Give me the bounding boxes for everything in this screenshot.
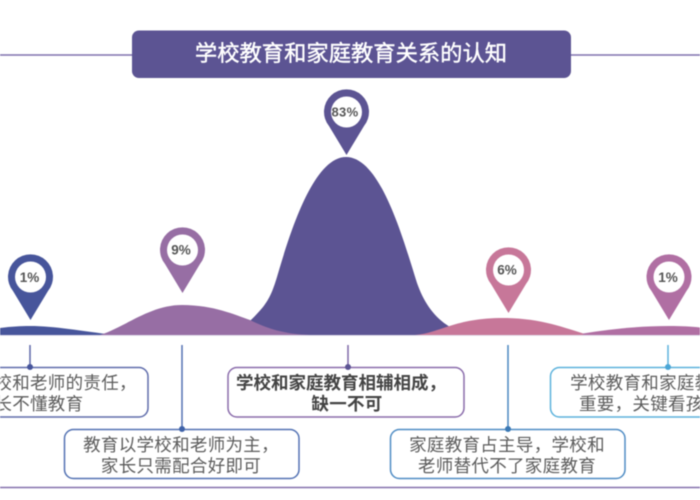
- callout: box 2: [64, 345, 299, 478]
- callout: box 4: [390, 345, 625, 478]
- pin: 6%: [486, 247, 531, 313]
- callout: box 2: 家长只需配合好即可: [101, 456, 261, 476]
- distribution curves chart: [0, 157, 700, 335]
- callout: box 3 (highlighted): 缺一不可: [311, 394, 383, 414]
- callout: box 3 (highlighted): 学校和家庭教育相辅相成，: [236, 373, 446, 393]
- callout: box 4: 家庭教育占主导，学校和: [409, 435, 605, 455]
- curve: 1% right: [583, 326, 700, 335]
- pin: 1% left: 1%: [20, 270, 39, 285]
- callout: box 3 (highlighted): [228, 345, 464, 417]
- pin: 1% right: [646, 254, 692, 320]
- pin: 1% left: [8, 254, 53, 320]
- title banner: 学校教育和家庭教育关系的认知: [195, 41, 507, 66]
- callout: box 1: [0, 345, 148, 417]
- title banner: [132, 30, 571, 78]
- callout: box 2: 教育以学校和老师为主，: [83, 435, 279, 455]
- pin: 6%: 6%: [497, 262, 517, 278]
- curve: 1% left: [0, 326, 115, 335]
- curve: 6%: [415, 318, 585, 335]
- pin: 83%: [324, 89, 369, 155]
- pin: 9%: [160, 227, 205, 293]
- callout: box 5: [550, 345, 700, 417]
- curve: 9%: [100, 305, 310, 335]
- pin: 1% right: 1%: [658, 270, 678, 285]
- pin: 9%: 9%: [171, 242, 191, 258]
- pin: 83%: 83%: [332, 104, 359, 120]
- callout: box 4: 老师替代不了家庭教育: [418, 456, 596, 476]
- curve: 83% peak: [225, 157, 480, 335]
